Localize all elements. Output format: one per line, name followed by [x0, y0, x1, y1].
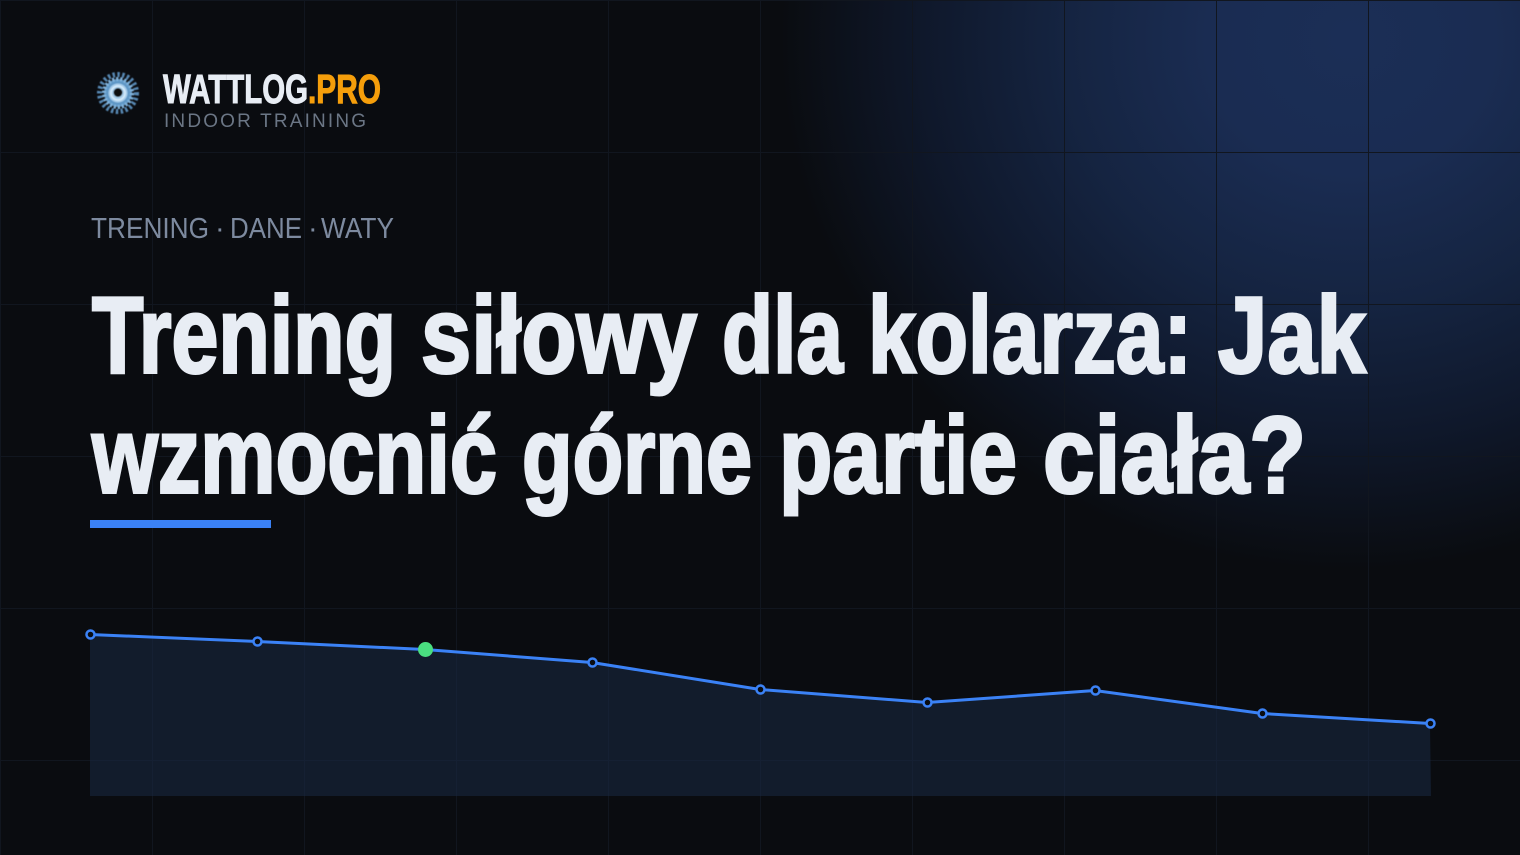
eyebrow: WATY [321, 213, 394, 245]
title: Jak [1218, 274, 1366, 396]
title: siłowy [421, 274, 697, 396]
icon: cassette gear [100, 74, 136, 112]
title [91, 274, 1366, 516]
title underline [90, 520, 271, 528]
line chart [86, 630, 1434, 796]
title: partie [779, 394, 1017, 516]
title: kolarza: [868, 274, 1192, 396]
logo wordmark: WATTLOG [163, 66, 308, 112]
title: górne [522, 394, 752, 516]
chart area [90, 634, 1431, 796]
title: Trening [92, 274, 396, 396]
logo tagline: INDOOR TRAINING [164, 111, 366, 132]
title: dla [722, 274, 844, 396]
title: wzmocnić [91, 394, 497, 516]
eyebrow: · [308, 213, 318, 245]
chart line [90, 634, 1430, 724]
eyebrow [91, 213, 394, 245]
eyebrow: · [215, 213, 225, 245]
title: ciała? [1043, 394, 1306, 516]
logo wordmark accent: .PRO [308, 66, 381, 112]
eyebrow: DANE [230, 213, 302, 245]
highlighted marker [418, 642, 433, 657]
logo [100, 66, 381, 132]
eyebrow: TRENING [91, 213, 209, 245]
chart markers [86, 630, 1434, 728]
